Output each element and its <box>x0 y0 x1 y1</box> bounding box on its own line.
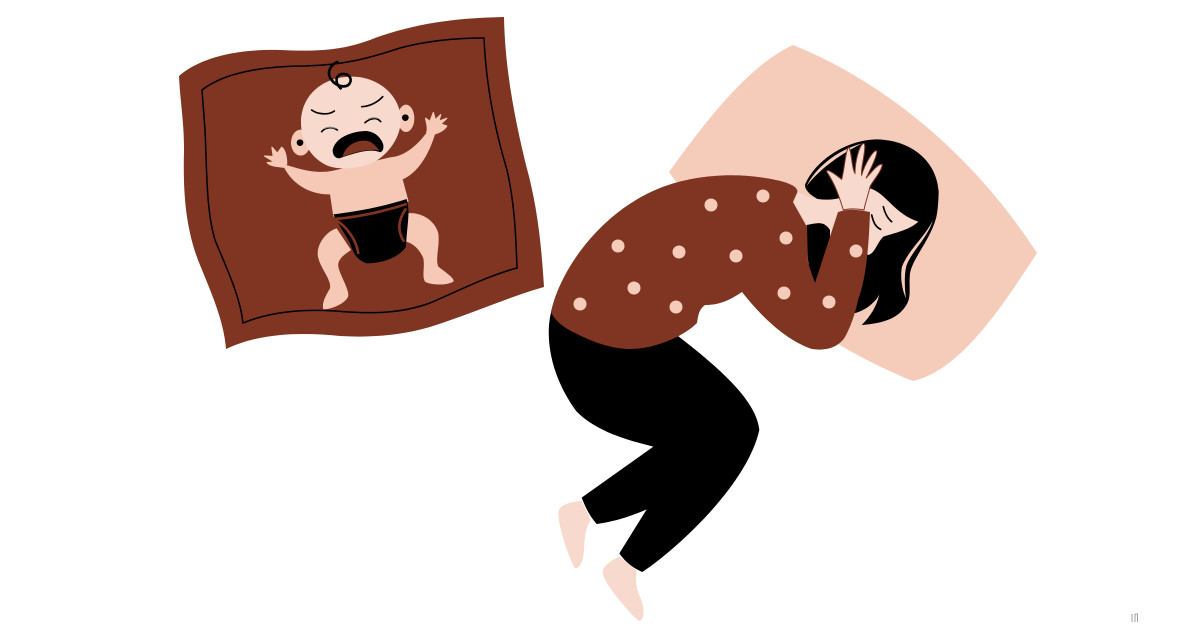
diaper <box>333 199 408 263</box>
baby head <box>301 77 401 168</box>
pillow <box>669 45 1037 381</box>
hair highlight top <box>807 143 862 186</box>
baby body and arms <box>283 132 435 217</box>
head and hair <box>793 139 939 325</box>
baby ears <box>291 105 414 156</box>
foot: back <box>558 501 591 568</box>
hand on head <box>827 143 882 210</box>
mother figure <box>549 139 939 621</box>
baby brows and eyes <box>312 97 383 132</box>
sweater polka dots <box>574 190 862 314</box>
logo mark <box>1132 614 1138 622</box>
hair highlight side <box>901 221 933 298</box>
sweater <box>551 175 870 350</box>
face and neck <box>793 188 918 255</box>
baby figure <box>265 62 454 309</box>
foot: front <box>603 557 644 621</box>
crying mouth <box>333 131 383 158</box>
hair <box>805 139 939 325</box>
baby left hand <box>265 147 287 167</box>
trousers <box>549 310 759 572</box>
closed eye <box>872 207 892 229</box>
baby left leg <box>318 228 351 309</box>
baby right leg <box>406 213 454 285</box>
panel: baby blanket <box>179 17 544 349</box>
hair curl <box>329 62 351 88</box>
baby right hand <box>426 113 447 134</box>
